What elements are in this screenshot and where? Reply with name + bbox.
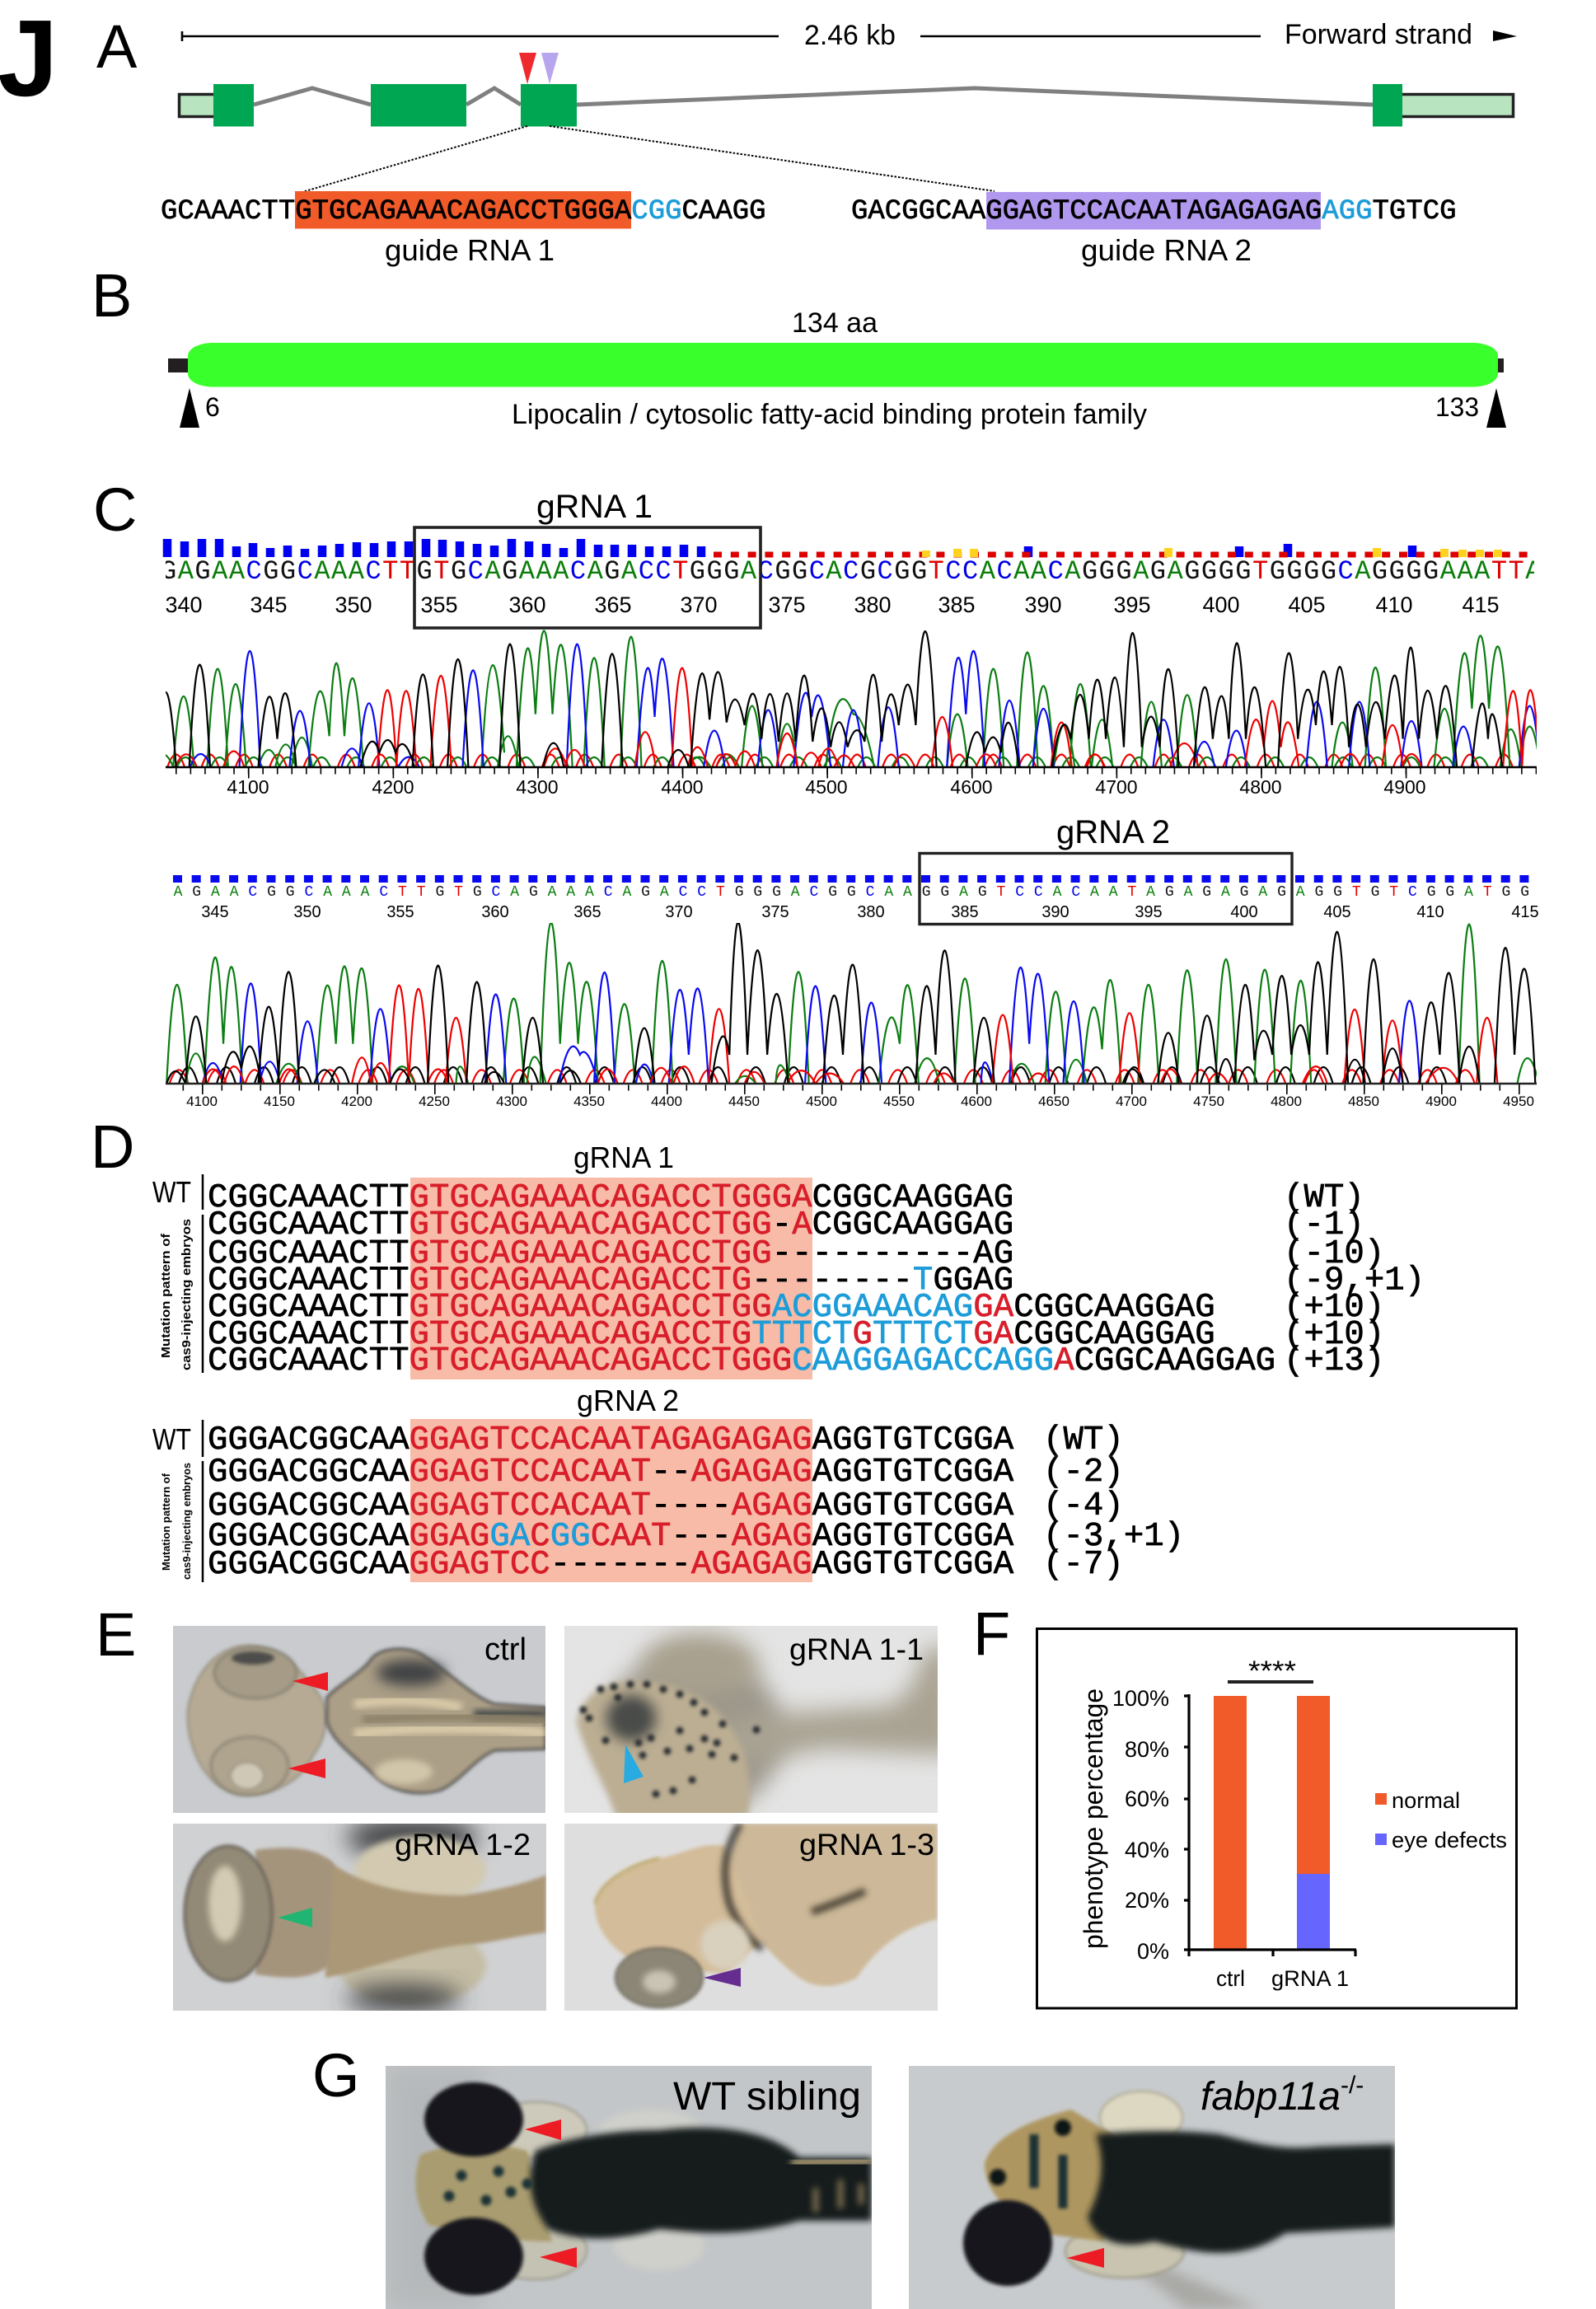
chromatogram 2 axis labels: 4150 xyxy=(264,1094,295,1109)
domain name: Lipocalin / cytosolic fatty-acid binding protein family xyxy=(512,399,1147,430)
chromatogram 2 axis labels: 4600 xyxy=(961,1094,992,1109)
guide RNA 2 label: guide RNA 2 xyxy=(1081,233,1252,267)
arrow: gRNA 1-2 xyxy=(278,1908,312,1927)
row +10 b: CGGCAAACTTGTGCAGAAACAGACCTGTTTCTGTTTCTGACGGCAAGGAG xyxy=(208,1316,1215,1354)
gRNA 1 highlight xyxy=(410,1178,812,1379)
scale label: 2.46 kb xyxy=(804,20,896,51)
gRNA 1 rotated label: Mutation pattern of xyxy=(159,1233,173,1358)
end residue: 133 xyxy=(1435,392,1479,422)
ctrl bar xyxy=(1214,1696,1247,1950)
photo: gRNA 1-1 embryo xyxy=(564,1626,938,1813)
label -2: (-2) xyxy=(1043,1454,1124,1492)
black trace 1 xyxy=(155,631,1502,767)
right UTR xyxy=(1401,94,1513,117)
base positions 1: 380 xyxy=(854,592,892,617)
label -7: (-7) xyxy=(1043,1546,1124,1584)
panel letter B: B xyxy=(91,261,132,330)
base positions 2: 405 xyxy=(1323,903,1351,921)
x label ctrl: ctrl xyxy=(1216,1966,1245,1991)
label fabp11a -/-: fabp11a xyxy=(1201,2075,1341,2119)
gRNA 2 sequences xyxy=(208,1421,1014,1584)
base positions 1: 350 xyxy=(335,592,372,617)
chromatogram 1 axis labels: 4600 xyxy=(950,776,993,798)
quality bars low xyxy=(714,552,1534,557)
exons xyxy=(213,84,1402,127)
green trace 1 xyxy=(153,630,1540,767)
row -10: CGGCAAACTTGTGCAGAAACAGACCTGG----------AG xyxy=(208,1235,1013,1273)
panel G: mutant phenotype xyxy=(312,2041,1395,2309)
gRNA 2 chromatogram heading: gRNA 2 xyxy=(1056,814,1170,850)
gRNA 2 divider xyxy=(202,1420,204,1582)
base positions 1: 355 xyxy=(420,592,458,617)
chromatogram 1 minor ticks xyxy=(176,768,1537,775)
chromatogram 2 axis xyxy=(166,1083,1537,1084)
label -9 +1: (-9,+1) xyxy=(1284,1262,1425,1300)
chart frame xyxy=(1037,1628,1516,2008)
photo: WT sibling xyxy=(386,2066,872,2309)
base positions 2: 350 xyxy=(293,903,321,921)
quality bars high xyxy=(167,539,1412,557)
y tick labels: 100% xyxy=(1112,1686,1169,1711)
label -4: (-4) xyxy=(1043,1487,1124,1525)
panel letter D: D xyxy=(91,1112,134,1181)
gRNA 1 chromatogram heading: gRNA 1 xyxy=(536,489,653,525)
base positions 1: 395 xyxy=(1113,592,1151,617)
noise 1 xyxy=(166,753,1514,766)
panel letter E: E xyxy=(96,1600,136,1669)
base calls 1: GAGAACGGCAAACTTGTGCAGAAACAGACCTGGGACGGCACGCGGTCCACAACAGGGAGAGGGGTGGGGCAGGGGAAATTA xyxy=(161,556,1542,587)
chromatogram 2 axis labels: 4200 xyxy=(341,1094,372,1109)
gRNA 1 mutation labels xyxy=(1284,1179,1425,1380)
base positions 2: 410 xyxy=(1416,903,1444,921)
base positions 1: 415 xyxy=(1462,592,1500,617)
label ctrl: ctrl xyxy=(484,1632,527,1667)
guide RNA 1 sequence: GCAAACTTGTGCAGAAACAGACCTGGGACGGCAAGG xyxy=(161,196,766,227)
label WT sibling: WT sibling xyxy=(673,2075,861,2119)
label -10: (-10) xyxy=(1284,1235,1384,1273)
label gRNA 1-1: gRNA 1-1 xyxy=(789,1632,924,1666)
photo: gRNA 1-2 embryo xyxy=(173,1816,546,2012)
chromatogram 2 axis labels: 4450 xyxy=(728,1094,760,1109)
chromatogram 2 axis labels: 4950 xyxy=(1503,1094,1534,1109)
base calls 2: AGAACGGCAAACTTGTGCAGAAACAGACCTGGGACGGCAAGGAGTCCACAATAGAGAGAGAGGTGTCGGATGG xyxy=(174,884,1539,901)
base positions 1: 375 xyxy=(768,592,806,617)
arrow: ctrl bottom eye xyxy=(288,1759,325,1778)
y tick labels: 80% xyxy=(1125,1737,1169,1762)
photo: ctrl embryo xyxy=(173,1626,545,1813)
gRNA 2 alignment heading: gRNA 2 xyxy=(577,1384,679,1417)
zoom dotted lines xyxy=(302,126,995,192)
row +10 a: CGGCAAACTTGTGCAGAAACAGACCTGGACGGAAACAGGACGGCAAGGAG xyxy=(208,1289,1215,1327)
base positions 2: 365 xyxy=(573,903,601,921)
chromatogram 1 axis labels: 4400 xyxy=(661,776,704,798)
chromatogram 2 axis labels: 4750 xyxy=(1193,1094,1224,1109)
arrow: gRNA 1-3 xyxy=(704,1968,741,1987)
base positions 2: 400 xyxy=(1230,903,1258,921)
noise 4 xyxy=(178,1066,1447,1083)
row -3 +1: GGGACGGCAAGGAGGACGGCAAT---AGAGAGGTGTCGGA xyxy=(208,1518,1014,1556)
chromatogram 1 traces xyxy=(153,630,1540,780)
row -4: GGGACGGCAAGGAGTCCACAAT----AGAGAGGTGTCGGA xyxy=(208,1487,1014,1525)
base positions 2: 395 xyxy=(1135,903,1163,921)
scale bar xyxy=(182,31,1261,41)
legend eye defects: eye defects xyxy=(1392,1828,1507,1852)
chromatogram 2 axis labels: 4700 xyxy=(1116,1094,1147,1109)
gRNA 2 mutation labels xyxy=(1043,1421,1184,1584)
panel letter A: A xyxy=(96,12,138,81)
row +13: CGGCAAACTTGTGCAGAAACAGACCTGGGCAAGGAGACCAGGACGGCAAGGAG xyxy=(208,1342,1275,1380)
left UTR xyxy=(180,94,216,117)
gRNA 1 divider xyxy=(202,1174,204,1373)
significance bar xyxy=(1228,1680,1313,1684)
quality bars 2 xyxy=(173,875,1534,883)
black trace 2 xyxy=(166,922,1535,1084)
WT label gRNA 1: WT xyxy=(152,1175,191,1209)
arrow: mutant eye xyxy=(1067,2248,1104,2268)
panel B: protein domain xyxy=(91,261,1506,430)
y tick labels: 20% xyxy=(1125,1888,1169,1913)
base positions 1: 340 xyxy=(165,592,203,617)
chromatogram 1 axis xyxy=(166,766,1537,768)
label WT: (WT) xyxy=(1284,1179,1364,1217)
chromatogram 1 axis labels: 4800 xyxy=(1239,776,1282,798)
label +10 b: (+10) xyxy=(1284,1316,1384,1354)
row -7: GGGACGGCAAGGAGTCC-------AGAGAGAGGTGTCGGA xyxy=(208,1546,1014,1584)
label -3 +1: (-3,+1) xyxy=(1043,1518,1184,1556)
label +13: (+13) xyxy=(1284,1342,1384,1380)
chromatogram 2 axis labels: 4650 xyxy=(1038,1094,1069,1109)
strand arrow xyxy=(1493,30,1517,41)
noise 3 xyxy=(168,1069,1476,1083)
row -2: GGGACGGCAAGGAGTCCACAAT--AGAGAGAGGTGTCGGA xyxy=(208,1454,1014,1492)
panel C: sequencing chromatograms xyxy=(93,475,1542,1109)
chromatogram 2 axis labels: 4800 xyxy=(1271,1094,1302,1109)
chromatogram 1 axis labels: 4900 xyxy=(1383,776,1426,798)
arrow: WT top xyxy=(525,2119,561,2140)
chromatogram 2 axis labels: 4850 xyxy=(1348,1094,1379,1109)
panel F: phenotype bar chart xyxy=(973,1599,1516,2008)
domain start arrow xyxy=(180,388,199,428)
label +10 a: (+10) xyxy=(1284,1289,1384,1327)
label -1: (-1) xyxy=(1284,1206,1364,1244)
guide RNA 2 sequence: GACGGCAAGGAGTCCACAATAGAGAGAGAGGTGTCG xyxy=(851,196,1457,227)
y axis title: phenotype percentage xyxy=(1079,1688,1108,1949)
chromatogram 1 axis labels: 4300 xyxy=(516,776,559,798)
row WT: CGGCAAACTTGTGCAGAAACAGACCTGGGACGGCAAGGAG xyxy=(208,1179,1013,1217)
lipocalin domain bar xyxy=(188,343,1498,387)
base positions 2: 370 xyxy=(665,903,693,921)
base positions 2: 355 xyxy=(386,903,414,921)
chromatogram 2 axis labels: 4550 xyxy=(883,1094,915,1109)
gRNA 2 box xyxy=(920,854,1292,925)
gRNA 1 alignment heading: gRNA 1 xyxy=(573,1140,674,1174)
base positions 1: 345 xyxy=(250,592,288,617)
base positions 1: 360 xyxy=(508,592,546,617)
gRNA 1 normal segment xyxy=(1297,1696,1330,1874)
protein length: 134 aa xyxy=(792,307,878,339)
row -1: CGGCAAACTTGTGCAGAAACAGACCTGG-ACGGCAAGGAG xyxy=(208,1206,1013,1244)
chromatogram 2 major ticks xyxy=(202,1084,1537,1094)
chromatogram 2 traces xyxy=(166,923,1537,1083)
panel letter G: G xyxy=(312,2041,360,2110)
panel letter C: C xyxy=(93,475,137,544)
base positions 1: 365 xyxy=(594,592,632,617)
row WT: GGGACGGCAAGGAGTCCACAATAGAGAGAGAGGTGTCGGA xyxy=(208,1421,1014,1459)
guide RNA 1 sequence highlight xyxy=(295,191,631,229)
chromatogram 1 major ticks xyxy=(248,768,1537,778)
chromatogram 1 axis labels: 4200 xyxy=(372,776,414,798)
base positions 1: 370 xyxy=(680,592,718,617)
base positions 2: 345 xyxy=(201,903,229,921)
significance stars: **** xyxy=(1248,1656,1296,1687)
red trace 1 xyxy=(176,668,1540,767)
arrow: WT bottom xyxy=(540,2247,577,2268)
label fabp11a -/-: -/- xyxy=(1341,2072,1364,2099)
gRNA 2 rotated label line 2: cas9-injecting embryos xyxy=(180,1463,193,1580)
blue trace 2 xyxy=(203,967,1420,1084)
label gRNA 1-3: gRNA 1-3 xyxy=(799,1828,934,1862)
chromatogram 2 axis labels: 4250 xyxy=(419,1094,450,1109)
y tick labels: 40% xyxy=(1125,1838,1169,1862)
guide RNA 2 marker xyxy=(541,53,559,84)
base positions 1: 410 xyxy=(1375,592,1413,617)
domain end arrow xyxy=(1486,388,1506,428)
base positions 2: 385 xyxy=(951,903,979,921)
chromatogram 2 axis labels: 4400 xyxy=(651,1094,682,1109)
gRNA 1 eye defects segment xyxy=(1297,1874,1330,1950)
panel letter F: F xyxy=(973,1599,1010,1668)
label WT: (WT) xyxy=(1043,1421,1124,1459)
chromatogram 2 axis labels: 4500 xyxy=(806,1094,837,1109)
chromatogram 2 axis labels: 4100 xyxy=(186,1094,218,1109)
red trace 2 xyxy=(203,986,1497,1084)
base positions 2: 415 xyxy=(1511,903,1539,921)
legend normal: normal xyxy=(1392,1788,1460,1813)
base positions 2: 375 xyxy=(761,903,789,921)
introns xyxy=(254,88,1373,105)
guide RNA 1 marker xyxy=(519,53,536,84)
arrow: gRNA 1-1 xyxy=(624,1745,644,1783)
panel D: mutation alignments xyxy=(91,1112,1425,1584)
row -9 +1: CGGCAAACTTGTGCAGAAACAGACCTG--------TGGAG xyxy=(208,1262,1013,1300)
y tick labels: 60% xyxy=(1125,1787,1169,1811)
base positions 2: 360 xyxy=(481,903,509,921)
guide RNA 2 sequence highlight xyxy=(986,192,1321,229)
chromatogram 1 axis labels: 4100 xyxy=(227,776,269,798)
gRNA 2 rotated label: Mutation pattern of xyxy=(160,1473,172,1571)
base positions 1: 400 xyxy=(1202,592,1240,617)
base positions 2: 380 xyxy=(857,903,885,921)
chromatogram 1 axis labels: 4700 xyxy=(1095,776,1138,798)
WT label gRNA 2: WT xyxy=(152,1422,191,1456)
axes and ticks xyxy=(1184,1694,1356,1956)
quality bars yellow xyxy=(926,548,1498,557)
start residue: 6 xyxy=(205,392,220,422)
panel E: embryo phenotypes xyxy=(96,1600,956,2012)
chromatogram 2 axis labels: 4350 xyxy=(573,1094,605,1109)
gRNA 1 rotated label line 2: cas9-injecting embryos xyxy=(180,1219,194,1370)
x label gRNA 1: gRNA 1 xyxy=(1271,1966,1349,1991)
guide RNA 1 label: guide RNA 1 xyxy=(385,233,555,267)
base positions 1: 385 xyxy=(938,592,976,617)
gRNA 2 highlight xyxy=(410,1419,812,1582)
photo: fabp11a mutant xyxy=(909,2066,1395,2309)
gRNA 1 sequences xyxy=(208,1179,1275,1380)
protein ends xyxy=(168,358,1504,372)
strand label: Forward strand xyxy=(1285,19,1472,50)
chromatogram 2 axis labels: 4900 xyxy=(1425,1094,1457,1109)
arrow: ctrl top eye xyxy=(293,1672,328,1691)
blue trace 1 xyxy=(190,644,1540,767)
panel A: gene structure xyxy=(96,12,1517,267)
gRNA 1 box xyxy=(414,527,761,628)
noise 2 xyxy=(176,756,1489,766)
base positions 1: 405 xyxy=(1288,592,1326,617)
photo: gRNA 1-3 embryo xyxy=(564,1824,938,2011)
chromatogram 1 axis labels: 4500 xyxy=(805,776,848,798)
base positions 1: 390 xyxy=(1024,592,1062,617)
chromatogram 2 axis labels: 4300 xyxy=(496,1094,527,1109)
label gRNA 1-2: gRNA 1-2 xyxy=(395,1828,531,1862)
base positions 2: 390 xyxy=(1041,903,1069,921)
y tick labels: 0% xyxy=(1137,1939,1169,1964)
green trace 2 xyxy=(166,923,1539,1084)
chromatogram 2 minor ticks xyxy=(183,1084,1537,1091)
